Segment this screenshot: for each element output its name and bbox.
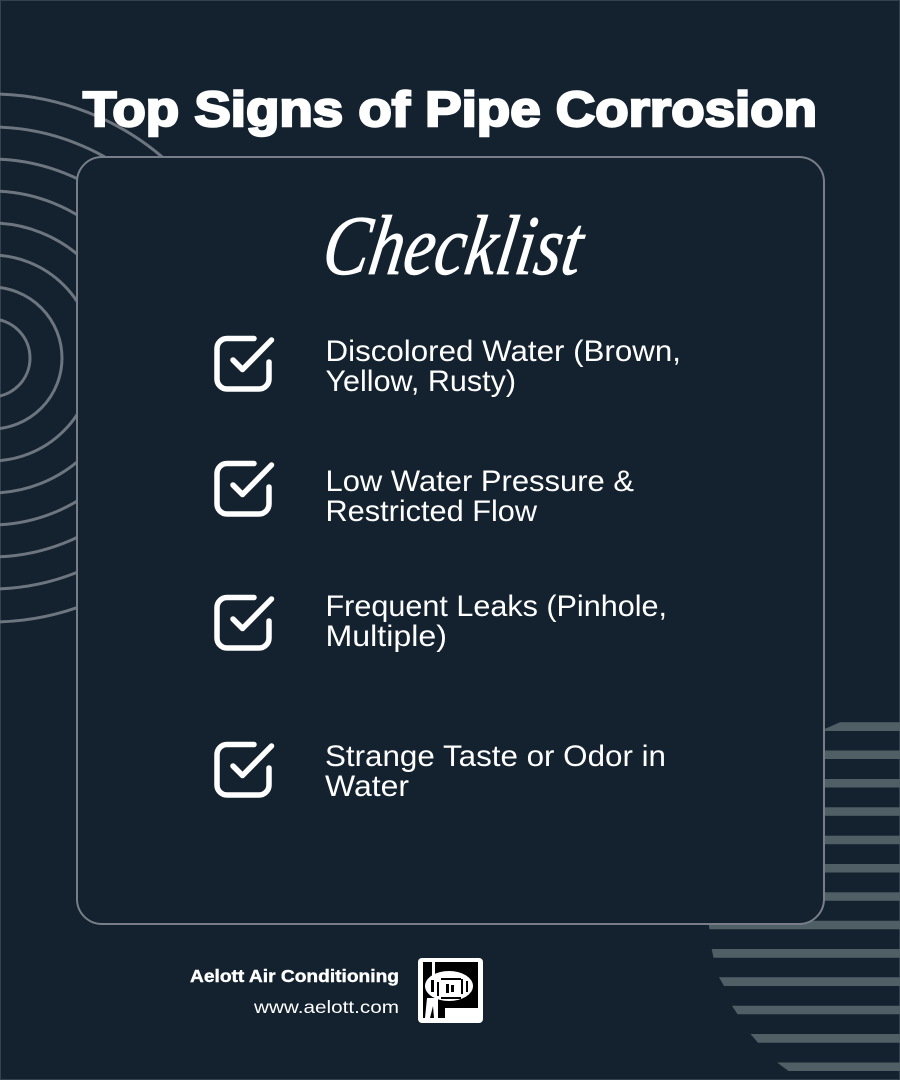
footer website: www.aelott.com	[253, 997, 399, 1017]
checklist item 1	[326, 335, 681, 398]
checklist item 2: Restricted Flow	[326, 495, 537, 528]
checklist item 2	[326, 465, 634, 528]
checklist item 3	[326, 590, 667, 653]
checklist item 3: Multiple)	[326, 620, 447, 653]
footer company name: Aelott Air Conditioning	[190, 966, 399, 986]
checklist item 4: Water	[325, 770, 409, 803]
decorative stripes	[708, 722, 900, 1071]
icon: checkbox 2	[217, 464, 272, 514]
title: Top Signs of Pipe Corrosion	[83, 83, 817, 137]
decorative concentric rings	[0, 94, 255, 622]
icon: checkbox 4	[217, 744, 272, 795]
logo	[418, 958, 483, 1023]
checklist item 4: Strange Taste or Odor in	[325, 740, 666, 773]
checklist item 1: Discolored Water (Brown,	[326, 335, 681, 368]
icon: checkbox 1	[217, 338, 272, 389]
icon: checkbox 3	[217, 598, 272, 648]
checklist item 3: Frequent Leaks (Pinhole,	[326, 590, 667, 623]
checklist item 2: Low Water Pressure &	[326, 465, 634, 498]
checklist item 4	[325, 740, 666, 803]
panel: checklist card	[77, 157, 824, 924]
checklist item 1: Yellow, Rusty)	[326, 365, 516, 398]
heading: Checklist: Checklist	[317, 198, 592, 293]
